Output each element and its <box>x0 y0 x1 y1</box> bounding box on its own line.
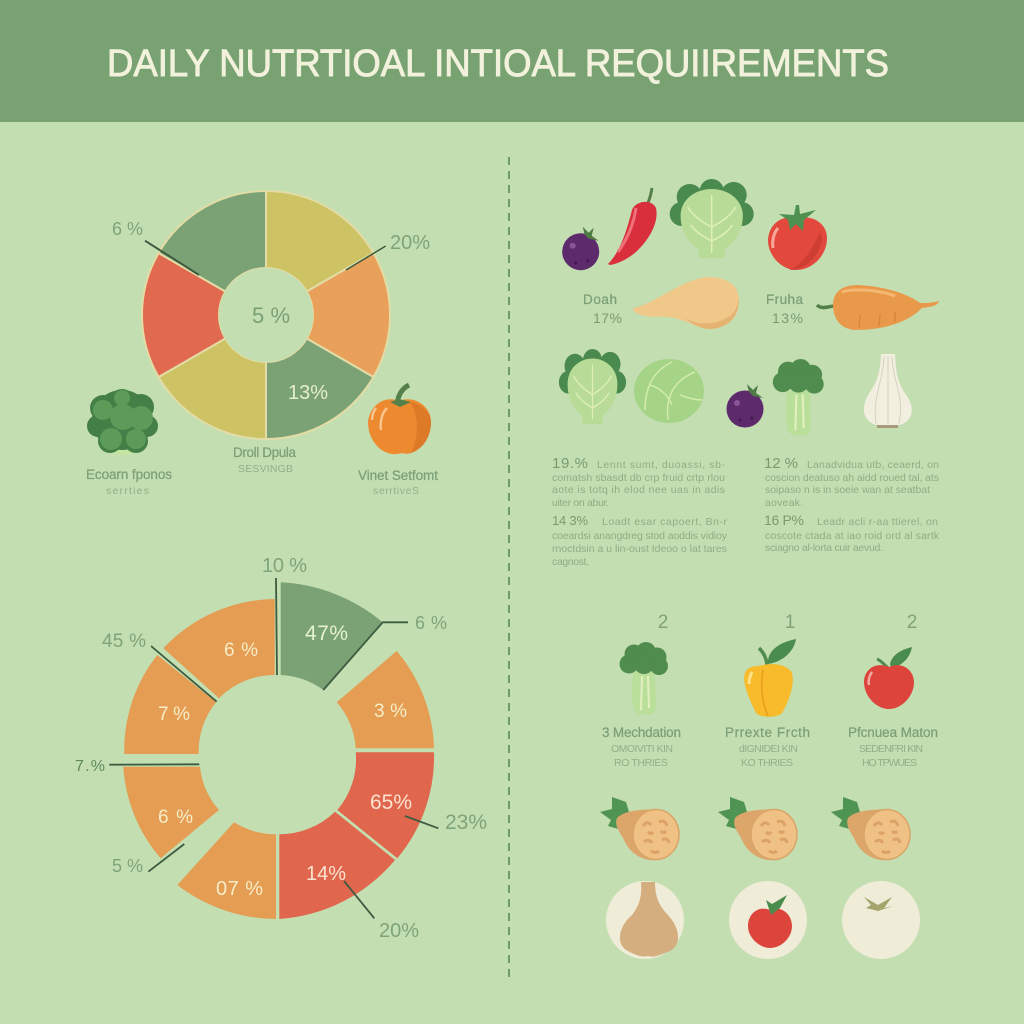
panel: text block bottom right: coscote ctada at iao roid ord al sartk <box>765 530 940 542</box>
label: centre food <box>233 445 296 475</box>
label: 7.%: 7.% <box>75 758 105 775</box>
icon: purple plum 2 <box>726 384 764 428</box>
panel: text block bottom right <box>764 512 940 554</box>
panel: text block top left: comatsh sbasdt db crp fruid crtp rlou <box>552 472 725 484</box>
panel: text block top left: aote is totq ih elod nee uas in adis <box>552 484 725 496</box>
panel: text block top left <box>552 455 726 509</box>
panel: text block top right: 12 % <box>764 455 798 472</box>
label: column 2: KO THRIES <box>741 757 793 769</box>
panel: text block bottom left: cagnost. <box>552 556 589 568</box>
label: column 1: OMOIVITI KIN <box>611 743 673 755</box>
panel: bottom donut chart <box>75 555 487 942</box>
label: Doah 17% <box>583 292 622 326</box>
label: Doah 17%: 17% <box>593 310 622 326</box>
label: Doah 17%: Doah <box>583 292 617 307</box>
panel: text block bottom left <box>552 513 728 568</box>
label: column 1 <box>602 725 681 769</box>
icon: purple plum <box>562 227 599 270</box>
label: 20%: 20% <box>390 232 430 254</box>
label: column 3: Pfcnuea Maton <box>848 725 938 740</box>
label: Fruha 13% <box>766 292 803 326</box>
icon: garlic <box>864 354 912 428</box>
icon: cut root 3 <box>831 797 910 860</box>
panel: text block top right: soipaso n is in soeie wan at seatbat <box>765 484 930 496</box>
icon: yellow pepper <box>744 639 796 717</box>
icon: plate with bulb <box>606 881 684 959</box>
icon: orange pepper <box>368 385 431 454</box>
label: left food: Ecoarn fponos <box>86 467 172 482</box>
label: Fruha 13%: Fruha <box>766 292 803 307</box>
panel: top donut chart <box>112 191 430 439</box>
number: 1: 1 <box>785 612 795 633</box>
panel: text block bottom right: 16 P% <box>764 512 804 528</box>
label: 6 % segment: 6 % <box>224 640 258 661</box>
number: 2: 2 <box>658 612 668 633</box>
label: 5 %: 5 % <box>112 856 143 876</box>
panel: text block top left: 19.% <box>552 455 588 472</box>
panel: text block bottom left: Loadt esar capoert, Bn-r <box>602 516 728 528</box>
label: column 2 <box>725 725 810 769</box>
label: 6 %: 6 % <box>112 219 143 239</box>
label: 14%: 14% <box>306 863 346 885</box>
icon: broccoli crown <box>87 389 158 455</box>
panel: text block top left: uiter on abur. <box>552 497 609 509</box>
icon: red chili <box>608 188 657 265</box>
title: DAILY NUTRTIOAL INTIOAL REQUIIREMENTS <box>107 43 889 85</box>
icon: cabbage <box>634 359 704 423</box>
panel: text block top left: Lennt sumt, duoassi, sb- <box>597 459 726 471</box>
label: left food: serrties <box>106 485 149 497</box>
icon: lettuce small <box>559 349 626 424</box>
panel: text block bottom right: Leadr acli r-aa ttierel, on <box>817 516 938 528</box>
label: column 3: SEDENFRI KIN <box>859 743 923 755</box>
label: right food: Vinet Setfomt <box>358 468 438 483</box>
icon: orange sweet potato <box>817 285 939 330</box>
icon: plate with tomato <box>729 881 807 959</box>
label: 23%: 23% <box>445 811 487 834</box>
icon: red apple <box>864 647 914 709</box>
label: centre food: SESVINGB <box>238 463 293 475</box>
panel: text block bottom left: coeardsi anangdreg stod aoddis vidioy <box>552 530 728 542</box>
label: 3 %: 3 % <box>374 701 407 722</box>
panel: text block bottom right: sciagno al-lorta cuir aevud. <box>765 542 883 554</box>
label: 45 %: 45 % <box>102 631 146 652</box>
label: column 3: HO TPWUES <box>862 757 917 769</box>
panel: text block bottom left: rnoctdsin a u lin-oust Ideoo o lat tares <box>552 543 727 555</box>
panel: text block top right: Lanadvidua utb, ceaerd, on <box>807 459 939 471</box>
icon: broccoli with stem <box>773 359 824 436</box>
panel: text block top right: coscion deatuso ah aidd roued tal, ats <box>765 472 939 484</box>
label: column 1: RO THRIES <box>614 757 668 769</box>
label: centre food: Droll Dpula <box>233 445 296 460</box>
label: 10 %: 10 % <box>262 555 307 577</box>
panel: text block bottom left: 14 3% <box>552 513 588 528</box>
label: 7 %: 7 % <box>158 704 190 725</box>
label: 47%: 47% <box>305 622 348 645</box>
label: 6 % outer: 6 % <box>415 613 447 633</box>
label: 65%: 65% <box>370 791 412 814</box>
icon: pale sweet potato <box>633 277 739 329</box>
label: column 2: Prrexte Frcth <box>725 725 810 740</box>
label: right food: serrtiveS <box>373 485 419 497</box>
number: 2: 2 <box>907 612 917 633</box>
icon: lettuce <box>670 179 754 258</box>
label: 13%: 13% <box>288 382 328 404</box>
label: left food <box>86 467 172 497</box>
panel: text block top right <box>764 455 939 509</box>
header banner <box>0 0 1024 122</box>
label: right food <box>358 468 438 497</box>
icon: plate with sprout <box>842 881 920 959</box>
label: column 2: dIGNIDEI KIN <box>739 743 798 755</box>
panel: text block top right: aoveak. <box>765 497 803 509</box>
label: 07 %: 07 % <box>216 878 263 900</box>
label: column 3 <box>848 725 938 769</box>
icon: cut root 1 <box>600 797 679 860</box>
icon: tomato <box>768 205 827 270</box>
label: column 1: 3 Mechdation <box>602 725 681 740</box>
icon: cut root 2 <box>718 797 797 860</box>
label: Fruha 13%: 13% <box>772 310 803 326</box>
label: centre 5 %: 5 % <box>252 303 290 328</box>
label: 6 % lower segment: 6 % <box>158 807 193 828</box>
icon: broccoli small <box>620 642 668 715</box>
label: 20%: 20% <box>379 920 419 942</box>
